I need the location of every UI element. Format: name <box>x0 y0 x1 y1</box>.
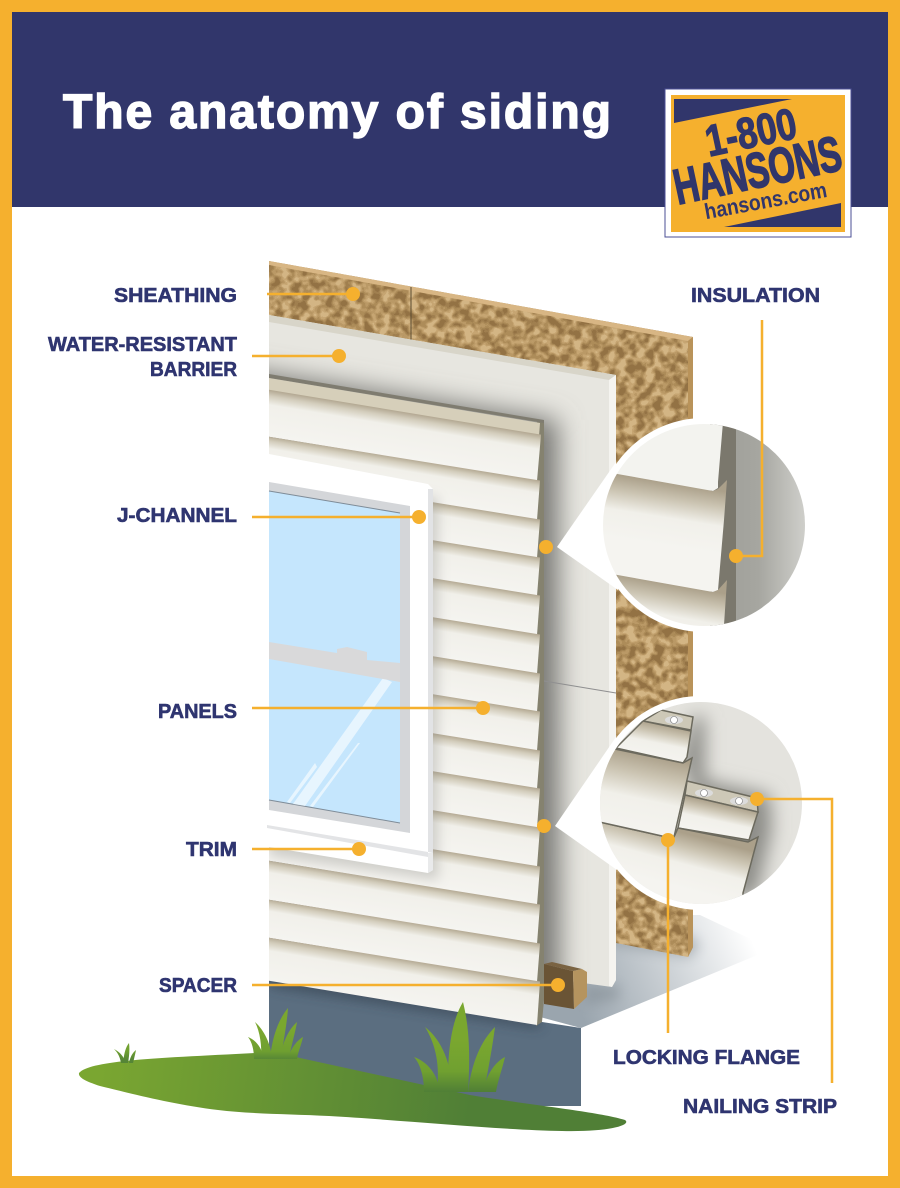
label: locking flange: LOCKING FLANGE <box>613 1047 800 1069</box>
callout: insulation magnifier <box>557 410 811 640</box>
lower panel <box>602 822 759 904</box>
title: The anatomy of siding <box>63 86 611 139</box>
window glass <box>269 491 400 823</box>
window sill <box>267 825 428 857</box>
label: water-resistant barrier: BARRIER <box>150 359 238 381</box>
top nailing strip <box>643 710 693 730</box>
label: spacer: SPACER <box>159 975 238 997</box>
window trim <box>267 454 433 873</box>
grass mound <box>79 1002 626 1131</box>
label: insulation <box>691 285 820 563</box>
window <box>267 454 433 873</box>
foundation wall <box>269 972 581 1106</box>
label: nailing strip <box>683 792 837 1118</box>
label: sheathing: SHEATHING <box>114 285 237 307</box>
sheathing board <box>265 255 695 965</box>
marker: insulation callout origin <box>539 540 553 554</box>
spacer block <box>544 962 587 1009</box>
small grass tuft <box>114 1043 136 1063</box>
label: panels: PANELS <box>158 701 237 723</box>
window frame <box>269 482 410 833</box>
header band <box>12 12 888 207</box>
medium grass tuft <box>248 1008 303 1059</box>
glass reflections <box>287 678 392 807</box>
nail heads <box>665 716 748 805</box>
label: j-channel <box>117 505 426 527</box>
label: spacer <box>159 975 565 997</box>
concrete slab top <box>540 915 772 1028</box>
slab contact shadow <box>585 935 700 1005</box>
logo: 1-800 HANSONS: 1-800 <box>701 99 801 166</box>
label: panels <box>158 701 490 723</box>
label: locking flange <box>613 833 800 1069</box>
label: water-resistant barrier <box>48 334 346 381</box>
meeting rail <box>269 642 400 682</box>
large left panel <box>595 745 692 837</box>
label: trim <box>186 839 366 861</box>
large grass tuft <box>414 1002 505 1092</box>
siding panels <box>269 374 544 1026</box>
label: water-resistant barrier: WATER-RESISTANT <box>48 334 237 356</box>
label: nailing strip: NAILING STRIP <box>683 1096 837 1118</box>
logo: 1-800 HANSONS: hansons.com <box>702 177 829 224</box>
marker: panel callout origin <box>537 819 551 833</box>
label: trim: TRIM <box>186 839 237 861</box>
callout: panel detail magnifier <box>555 695 810 910</box>
logo: 1-800 HANSONS <box>665 89 851 237</box>
label: insulation: INSULATION <box>691 285 820 307</box>
water-resistant barrier <box>269 315 616 987</box>
label: j-channel: J-CHANNEL <box>117 505 237 527</box>
label: sheathing <box>114 285 360 307</box>
right nailing strip <box>685 781 758 812</box>
